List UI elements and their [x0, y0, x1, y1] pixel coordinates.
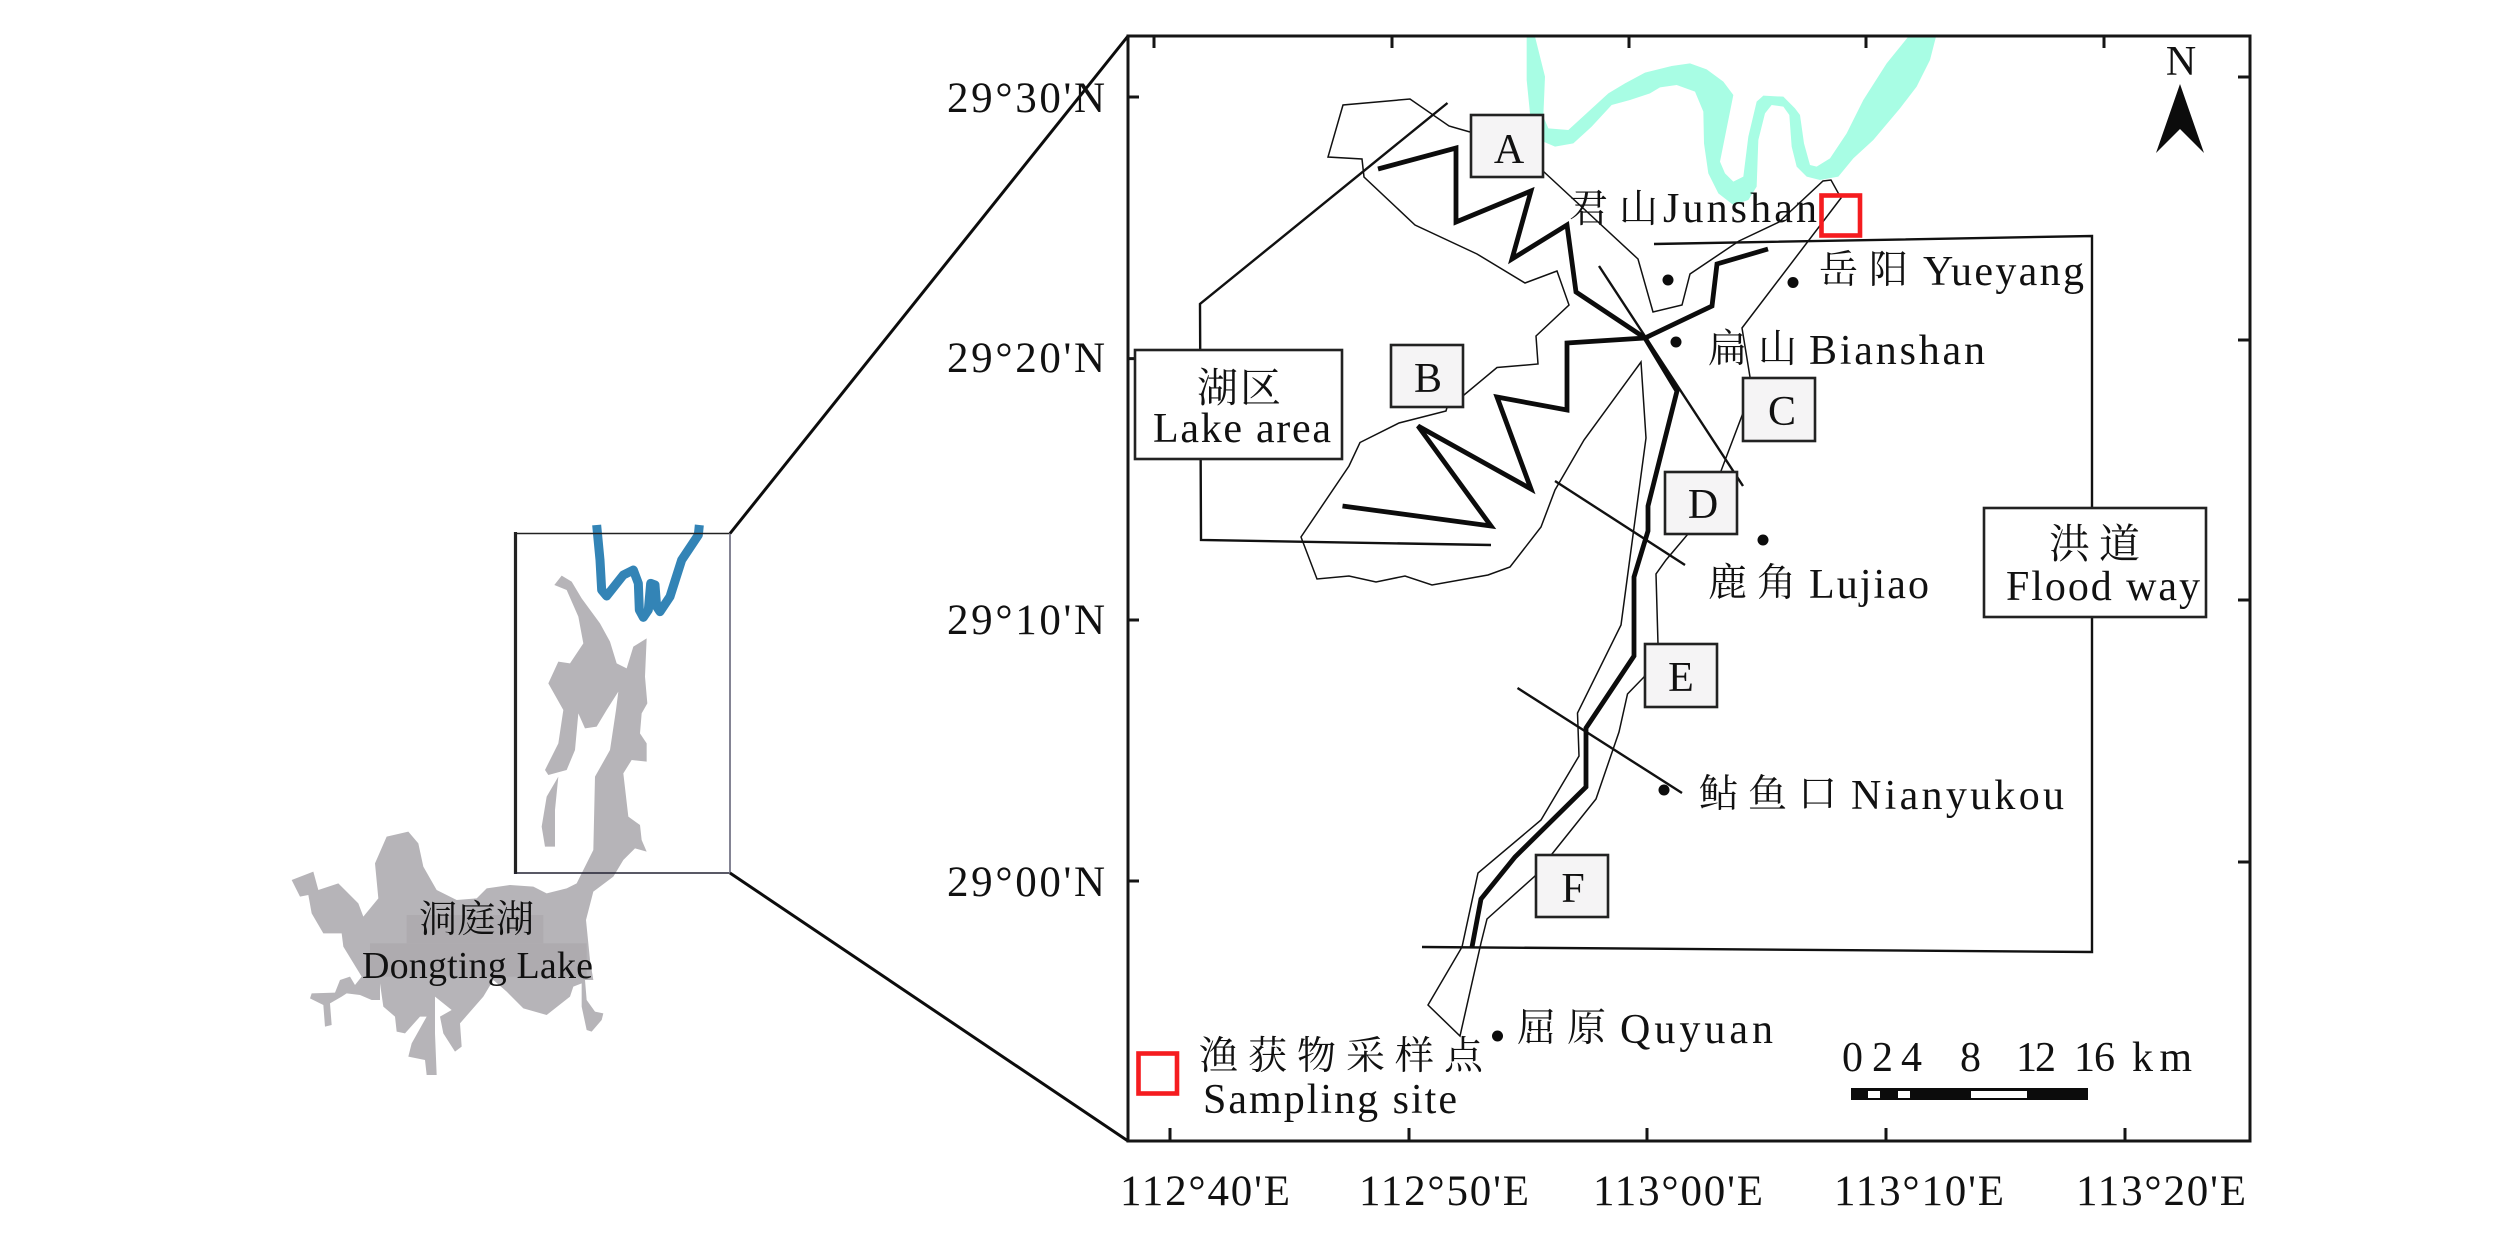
label: Lujiao: Lujiao: [1809, 562, 1929, 608]
lake shape: [292, 576, 647, 1075]
lake area label: 湖区: [1197, 365, 1281, 411]
section line C: [1599, 266, 1743, 486]
label: Lujiao: [1708, 562, 1929, 608]
section box C: C: [1768, 389, 1796, 435]
label: Junshan: Junshan: [1663, 186, 1817, 232]
section box E: E: [1668, 655, 1694, 701]
longitude labels: 113°00'E: [1593, 1168, 1763, 1215]
flood way label: [1984, 508, 2206, 617]
longitude labels: 113°10'E: [1834, 1168, 2004, 1215]
label: Quyuan: [1517, 1007, 1773, 1053]
label: Nianyukou: [1699, 773, 2064, 819]
section box D: [1665, 472, 1737, 534]
section box F: [1536, 855, 1608, 917]
label: Yueyang: Yueyang: [1923, 249, 2084, 295]
label: Nianyukou: 口: [1798, 773, 1837, 816]
longitude labels: 113°20'E: [2076, 1168, 2246, 1215]
sampling site marker: [1822, 196, 1860, 236]
longitude labels: 112°50'E: [1359, 1168, 1529, 1215]
zoom connector lines: [730, 36, 1128, 1141]
town dots: [1492, 274, 1798, 1042]
latitude labels: 29°00'N: [947, 859, 1105, 906]
section line D: [1555, 481, 1685, 565]
latitude labels: 29°20'N: [947, 335, 1105, 382]
section box D: D: [1688, 482, 1718, 528]
label: Bianshan: 山: [1758, 328, 1797, 371]
label: Bianshan: 扁: [1708, 328, 1747, 371]
section box A: A: [1494, 127, 1525, 173]
scale bar: 16: [2074, 1035, 2115, 1081]
scale bar: 4: [1901, 1035, 1922, 1081]
label: Yueyang: 阳: [1869, 249, 1908, 292]
label: Nianyukou: 鱼: [1748, 773, 1787, 816]
section box C: [1743, 378, 1815, 441]
north arrow: N: [2166, 39, 2196, 85]
lake outline: [1301, 99, 1841, 1036]
lake area label: [1135, 350, 1342, 459]
scale bar: [1842, 1035, 2192, 1100]
flood way boundary: [1422, 236, 2092, 952]
latitude labels: 29°10'N: [947, 597, 1105, 644]
lake area label: Lake area: [1153, 406, 1331, 452]
flood way label: 洪道: [2049, 521, 2140, 567]
label: Yueyang: 岳: [1819, 249, 1858, 292]
section box E: [1645, 644, 1717, 707]
label: Yueyang: [1819, 249, 2084, 295]
label: Junshan: 山: [1619, 188, 1658, 231]
section box F: F: [1561, 866, 1585, 912]
label: Lujiao: 鹿: [1708, 562, 1747, 605]
latitude labels: 29°30'N: [947, 75, 1105, 122]
section box B: B: [1414, 356, 1442, 402]
section box B: [1391, 345, 1463, 407]
section line E: [1518, 688, 1682, 793]
label: Lujiao: 角: [1757, 562, 1796, 605]
label: Bianshan: [1708, 328, 1985, 374]
scale bar: 2: [1872, 1035, 1893, 1081]
lake name: [362, 899, 593, 987]
label: Nianyukou: 鲇: [1699, 773, 1738, 816]
north arrow: [2156, 39, 2204, 153]
legend: sampling site: 渔获物采样点: [1199, 1035, 1484, 1078]
label: Quyuan: Quyuan: [1620, 1007, 1773, 1053]
label: Junshan: [1569, 186, 1817, 232]
longitude labels: [1120, 1168, 2246, 1215]
scale bar: 12: [2016, 1035, 2056, 1081]
label: Quyuan: 原: [1567, 1007, 1606, 1050]
legend: sampling site: Sampling site: [1203, 1077, 1457, 1123]
panel: overview map of Dongting Lake: [292, 525, 730, 1075]
panel: detail map: [947, 36, 2250, 1215]
map frame and ticks: [1128, 36, 2250, 1141]
legend: sampling site: [1138, 1035, 1484, 1123]
lake name: Dongting Lake: [362, 945, 593, 987]
section box A: [1471, 115, 1543, 177]
flood way label: Flood way: [2006, 564, 2200, 610]
latitude labels: [947, 75, 1105, 906]
scale bar: km: [2132, 1035, 2192, 1081]
scale bar: 8: [1960, 1035, 1981, 1081]
lake name: 洞庭湖: [419, 899, 534, 941]
label: Quyuan: 屈: [1517, 1007, 1556, 1050]
label: Bianshan: Bianshan: [1809, 328, 1985, 374]
inset frame: [514, 532, 730, 874]
Yangtze river segment: [597, 525, 699, 617]
longitude labels: 112°40'E: [1120, 1168, 1290, 1215]
label: Nianyukou: Nianyukou: [1851, 773, 2064, 819]
river: [1527, 37, 1936, 205]
sampling transects: [1342, 148, 1768, 947]
label: Junshan: 君: [1569, 188, 1608, 231]
scale bar: 0: [1842, 1035, 1863, 1081]
lake area boundary: [1200, 103, 1491, 545]
